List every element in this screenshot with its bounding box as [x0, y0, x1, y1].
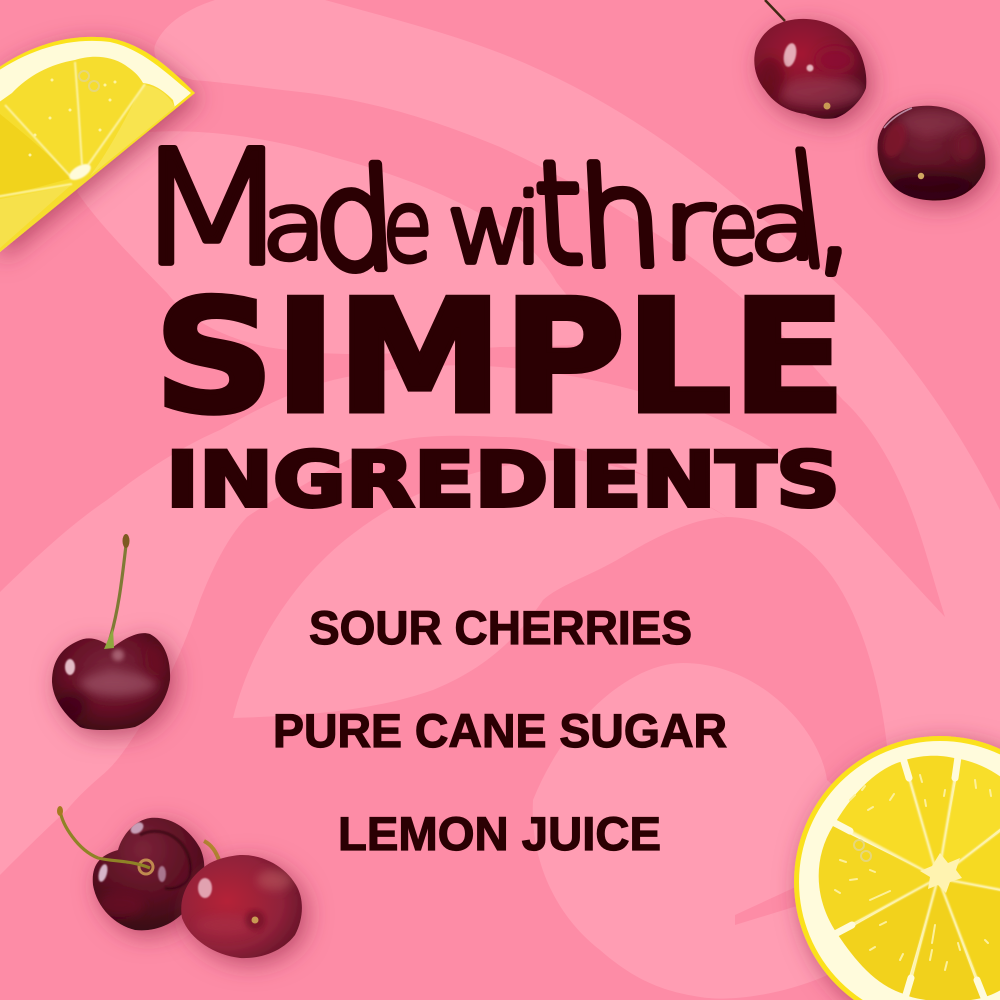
cherry stem — [60, 810, 150, 868]
heading: handwritten line: a — [749, 174, 818, 280]
lemon core — [920, 853, 962, 893]
heading: handwritten line: l — [784, 127, 833, 301]
heading: SIMPLE: SIMPLE — [154, 266, 846, 448]
lemon pith notches — [833, 757, 1000, 1000]
cherry middle left with stem — [52, 534, 170, 730]
ingredient: lemon juice: LEMON JUICE — [338, 807, 661, 860]
heading: handwritten line: t — [531, 132, 587, 295]
cherry top right, dark — [878, 106, 985, 200]
heading: handwritten line: r — [662, 171, 714, 281]
cherry top right with stem — [754, 0, 866, 119]
dark cherry — [93, 818, 204, 930]
ingredient: pure cane sugar: PURE CANE SUGAR — [273, 704, 727, 757]
heading: handwritten line: h — [575, 141, 666, 297]
lemon texture specks — [835, 775, 991, 970]
wedge flesh — [0, 57, 175, 252]
heading: handwritten line: i — [515, 174, 543, 285]
heading: handwritten line: d — [309, 141, 400, 301]
red cherry — [181, 855, 302, 958]
heading: handwritten line — [132, 116, 855, 301]
heading: handwritten line: w — [447, 174, 529, 285]
pair of cherries bottom left — [57, 806, 302, 958]
lemon membranes — [835, 759, 1000, 998]
lemon slice bottom right — [794, 736, 1000, 1000]
lemon wedge top left — [0, 37, 195, 252]
small stem behind — [204, 841, 219, 860]
heading: handwritten line: e — [709, 171, 758, 285]
lemon rind — [794, 736, 1000, 1000]
ingredient: sour cherries: SOUR CHERRIES — [309, 601, 692, 654]
cherry stem — [108, 545, 126, 645]
heading: handwritten line: a — [262, 173, 326, 280]
lemon pith — [799, 741, 1000, 1000]
heading: handwritten line: e — [383, 169, 432, 283]
cherry stem — [765, 0, 785, 21]
heading: handwritten line: , — [814, 137, 855, 289]
heading: INGREDIENTS: INGREDIENTS — [166, 435, 840, 524]
heading: handwritten line: M — [132, 116, 292, 301]
lemon flesh segments — [819, 756, 1000, 1000]
